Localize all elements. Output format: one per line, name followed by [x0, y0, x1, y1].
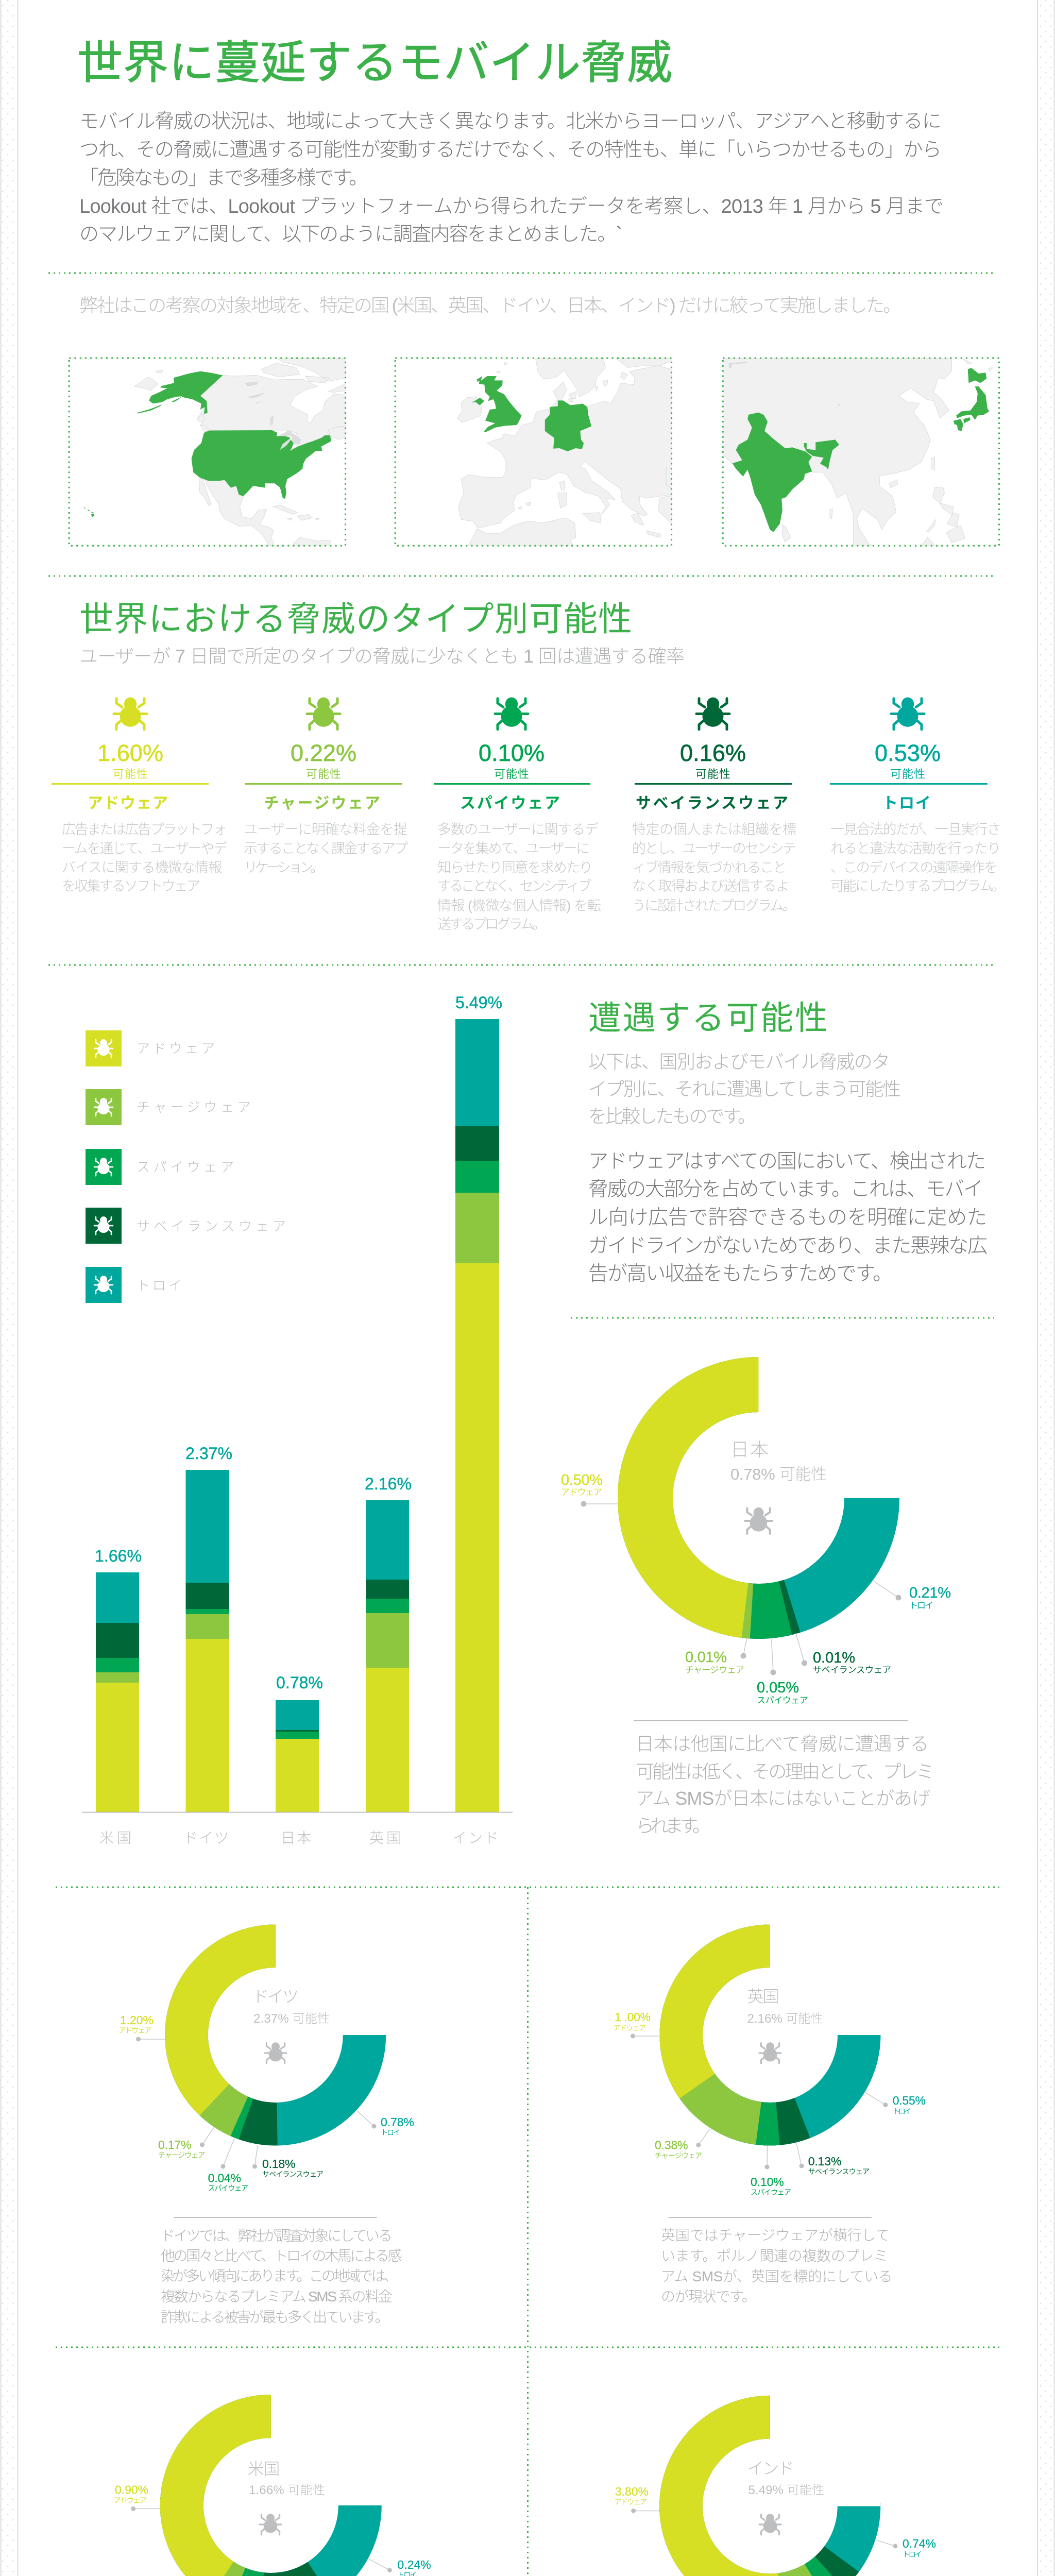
heading: likelihood of encounter: 遭遇する可能性 [588, 999, 828, 1037]
threat type: trojan: れると違法な活動を行ったり [830, 841, 1001, 856]
icon: spyware bug [495, 698, 528, 730]
threat type: chargeware: ユーザーに明確な料金を提 [244, 822, 407, 837]
bar: UK: 英国 [369, 1830, 401, 1846]
threat type: spyware: 0.10% [479, 740, 544, 766]
icon: bug [759, 2514, 781, 2535]
intro paragraph: Lookout 社では、Lookout プラットフォームから得られたデータを考察し、2013 年 1 月から 5 月まで [79, 196, 944, 217]
description: dark: アドウェアはすべての国において、検出された [588, 1150, 986, 1173]
panel: UK: アム SMSが、英国を標的にしている [661, 2268, 893, 2284]
bar: Germany: ドイツ [183, 1830, 229, 1846]
panel: USA: アドウェア [114, 2496, 147, 2504]
intro paragraph [79, 111, 944, 245]
panel: UK: アドウェア [614, 2024, 646, 2032]
panel: Germany: 0.17% [158, 2138, 192, 2151]
panel: Germany: 2.37% 可能性 [253, 2012, 330, 2026]
bar: Japan [276, 1673, 323, 1846]
panel: Japan: 0.78% 可能性 [730, 1465, 827, 1483]
panel: Japan: 可能性は低く、その理由として、プレミ [636, 1761, 934, 1782]
panel: Germany: アドウェア [118, 2026, 151, 2035]
panel: UK: 2.16% 可能性 [747, 2012, 823, 2026]
threat type: spyware: ータを集めて、ユーザーに [437, 841, 590, 856]
icon: bug [260, 2514, 281, 2535]
threat type: trojan: 、このデバイスの遠隔操作を [830, 860, 998, 875]
panel: Germany: トロイ [381, 2128, 400, 2137]
icon: chargeware bug [307, 698, 340, 730]
description: dark: 告が高い収益をもたらすためです。 [588, 1263, 893, 1285]
panel: Japan: 0.05% [757, 1680, 799, 1696]
donut: Japan [645, 1385, 872, 1612]
panel: Germany: スパイウェア [208, 2184, 248, 2192]
legend: スパイウェア [137, 1159, 234, 1175]
subheading: ユーザーが 7 日間で所定のタイプの脅威に少なくとも 1 回は遭遇する確率 [79, 646, 685, 667]
threat type: surveillanceware [632, 698, 796, 913]
panel: Germany: 他の国々と比べて、トロイの木馬による感 [161, 2248, 402, 2264]
threat type: adware [52, 698, 227, 894]
stacked bar chart [82, 993, 513, 1846]
panel: UK: 英国ではチャージウェアが横行して [661, 2227, 890, 2243]
panel: Japan: 0.21% [909, 1585, 951, 1601]
bar: India: 5.49% [455, 993, 502, 1012]
threat type: adware: 可能性 [113, 768, 148, 781]
icon: bug [745, 1507, 772, 1534]
donut: Germany [186, 1946, 364, 2124]
panel: Japan: 日本 [730, 1439, 769, 1460]
panel: Japan: 日本は他国に比べて脅威に遭遇する [636, 1733, 929, 1754]
panel: Germany: ドイツ [252, 1987, 299, 2006]
panel: India: アドウェア [614, 2498, 647, 2506]
threat type: trojan: 可能にしたりするプログラム。 [830, 878, 1006, 894]
bar: US [95, 1547, 142, 1846]
description: light [588, 1051, 901, 1127]
panel: Japan: られます。 [636, 1815, 711, 1836]
threat type: surveillanceware: ィブ情報を気づかれること [632, 860, 787, 875]
threat type: adware: ームを通じて、ユーザーやデ [62, 841, 227, 856]
bar: Japan: 0.78% [276, 1673, 323, 1692]
icon: trojan bug [891, 698, 924, 730]
description: light: 以下は、国別およびモバイル脅威のタ [588, 1051, 890, 1072]
legend: トロイ [137, 1278, 182, 1293]
panel: UK: 1 .00% [615, 2010, 651, 2024]
bar: US: 1.66% [95, 1547, 142, 1565]
panel: Germany: 詐欺による被害が最も多く出ています。 [161, 2309, 389, 2325]
threat type: spyware [434, 698, 601, 932]
panel: India: 0.74% [903, 2537, 936, 2550]
panel: Japan: 0.01% [685, 1649, 727, 1666]
threat type: chargeware [244, 698, 408, 875]
panel: Japan [561, 1385, 951, 1836]
bar: Germany: 2.37% [185, 1444, 232, 1463]
panel: UK: 0.10% [751, 2175, 784, 2189]
threat type: surveillanceware: うに設計されたプログラム。 [632, 898, 796, 913]
intro paragraph: のマルウェアに関して、以下のように調査内容をまとめました。` [79, 224, 622, 245]
threat type: trojan: 0.53% [875, 740, 941, 766]
legend [86, 1030, 286, 1303]
bar: Japan: 日本 [281, 1830, 311, 1846]
threat type: surveillanceware: 的とし、ユーザーのセンシテ [632, 841, 796, 856]
scope statement: 弊社はこの考察の対象地域を、特定の国 (米国、英国、ドイツ、日本、インド) だけに絞って実施しました。 [79, 295, 901, 316]
legend: チャージウェア [137, 1099, 251, 1115]
donut: UK [681, 1946, 859, 2124]
threat type: spyware: 可能性 [494, 768, 529, 781]
panel: Japan: 0.50% [561, 1472, 603, 1488]
threat type: spyware: 情報 (機微な個人情報) を転 [437, 898, 601, 913]
threat type: surveillanceware: なく取得および送信するよ [632, 878, 790, 894]
panel: Germany: 0.78% [381, 2115, 414, 2129]
threat type: spyware: することなく、センシティブ [437, 878, 592, 894]
threat type: trojan: 一見合法的だが、一旦実行さ [830, 822, 1001, 837]
threat type: surveillanceware: 特定の個人または組織を標 [632, 822, 796, 837]
panel: UK: サベイランスウェア [808, 2167, 870, 2176]
panel: India [614, 2417, 936, 2576]
threat type: adware: バイスに関する機微な情報 [62, 860, 222, 875]
threat type: chargeware: チャージウェア [264, 795, 380, 812]
description: light: を比較したものです。 [588, 1106, 756, 1127]
intro paragraph: モバイル脅威の状況は、地域によって大きく異なります。北米からヨーロッパ、アジアへと移動するに [79, 111, 942, 132]
panel: UK: 0.13% [808, 2155, 841, 2168]
panel: Japan: アドウェア [561, 1487, 602, 1497]
threat type: trojan: トロイ [882, 795, 931, 812]
panel: Japan: 0.01% [813, 1650, 855, 1666]
bar: US: 米国 [99, 1830, 131, 1846]
panel: Germany [118, 1946, 414, 2325]
threat type: chargeware: 0.22% [291, 740, 356, 766]
panel: Japan: スパイウェア [757, 1696, 808, 1705]
threat type: adware: アドウェア [88, 795, 168, 812]
threat type: adware: 1.60% [97, 740, 163, 766]
bar: UK: 2.16% [365, 1475, 412, 1493]
bar: Germany [183, 1444, 232, 1846]
panel: UK: スパイウェア [751, 2188, 791, 2196]
threat type: spyware: 多数のユーザーに関するデ [437, 822, 599, 837]
donut: USA [182, 2416, 360, 2576]
donut: India [681, 2417, 859, 2576]
panel: Germany: 0.18% [262, 2157, 296, 2171]
panel: UK: のが現状です。 [661, 2289, 756, 2304]
panel: USA: 0.24% [397, 2558, 431, 2571]
threat type: spyware: スパイウェア [460, 795, 560, 812]
panel: Germany: サベイランスウェア [262, 2170, 324, 2178]
panel: Germany: 0.04% [208, 2171, 241, 2184]
panel: USA [114, 2416, 431, 2576]
threat type: adware: を収集するソフトウェア [62, 878, 200, 894]
panel: USA: 0.90% [115, 2483, 148, 2497]
panel: Japan: サベイランスウェア [813, 1665, 891, 1675]
panel: UK: 0.38% [655, 2139, 688, 2152]
panel: Germany: 染が多い傾向にあります。この地域では、 [161, 2268, 398, 2284]
heading: threats by type: 世界における脅威のタイプ別可能性 [79, 600, 632, 638]
intro paragraph: つれ、その脅威に遭遇する可能性が変動するだけでなく、その特性も、単に「いらつかせるもの」から [79, 139, 942, 161]
panel: USA: 1.66% 可能性 [249, 2483, 325, 2497]
panel: India: インド [747, 2459, 794, 2478]
right decorative strip [1037, 0, 1055, 2576]
threat type: chargeware: 示することなく課金するアプ [244, 841, 408, 856]
threat type: surveillanceware: 0.16% [680, 740, 746, 766]
panel: Germany: チャージウェア [158, 2151, 205, 2159]
intro paragraph: 「危険なもの」まで多種多様です。 [79, 167, 368, 189]
map: Europe [395, 358, 672, 546]
threat type: surveillanceware: 可能性 [695, 768, 730, 781]
threat type: spyware: 知らせたり同意を求めたり [437, 860, 593, 875]
panel: Japan: チャージウェア [685, 1665, 744, 1675]
panel: USA: 米国 [248, 2460, 280, 2478]
panel: UK: チャージウェア [655, 2151, 702, 2160]
panel: UK: 英国 [747, 1987, 779, 2006]
threat type: spyware: 送するプログラム。 [437, 917, 546, 932]
threat type: trojan: 可能性 [890, 768, 925, 781]
threat type: chargeware: 可能性 [306, 768, 341, 781]
panel: UK: います。ポルノ関連の複数のプレミ [661, 2248, 888, 2264]
threat type: chargeware: リケーション。 [244, 860, 324, 875]
description: light: イプ別に、それに遭遇してしまう可能性 [588, 1078, 901, 1099]
bar: India: インド [452, 1830, 499, 1846]
icon: adware bug [114, 698, 147, 730]
panel: Germany: 1.20% [120, 2013, 154, 2027]
legend: アドウェア [137, 1041, 215, 1056]
panel: Japan: トロイ [909, 1601, 933, 1611]
legend: サベイランスウェア [137, 1218, 286, 1234]
panel: Japan: アム SMSが日本にはないことがあげ [636, 1788, 930, 1809]
panel: Germany: ドイツでは、弊社が調査対象にしている [161, 2228, 393, 2244]
panel: UK: トロイ [893, 2107, 911, 2115]
icon: surveillanceware bug [696, 698, 729, 730]
description: dark: 脅威の大部分を占めています。これは、モバイ [588, 1178, 983, 1200]
panel: UK: 0.55% [893, 2094, 926, 2107]
panel: Germany: 複数からなるプレミアム SMS 系の料金 [161, 2289, 393, 2304]
bar: India [452, 993, 502, 1846]
title: 世界に蔓延するモバイル脅威 [77, 37, 672, 88]
left decorative strip [0, 0, 18, 2576]
threat type: surveillanceware: サベイランスウェア [636, 795, 788, 812]
description: dark: ル向け広告で許容できるものを明確に定めた [588, 1207, 987, 1229]
map: North America [69, 358, 346, 546]
map: Asia [723, 358, 999, 546]
description: dark: ガイドラインがないためであり、また悪辣な広 [588, 1235, 988, 1257]
threat type: trojan [830, 698, 1006, 894]
description: dark [588, 1150, 988, 1285]
threat type: adware: 広告または広告プラットフォ [62, 822, 227, 837]
icon: bug [265, 2042, 286, 2063]
bar: UK [365, 1475, 412, 1846]
icon: bug [759, 2042, 781, 2063]
panel: UK [614, 1946, 926, 2304]
panel: India: 5.49% 可能性 [748, 2483, 824, 2497]
panel: India: トロイ [903, 2550, 922, 2558]
panel: India: 3.80% [615, 2485, 649, 2498]
